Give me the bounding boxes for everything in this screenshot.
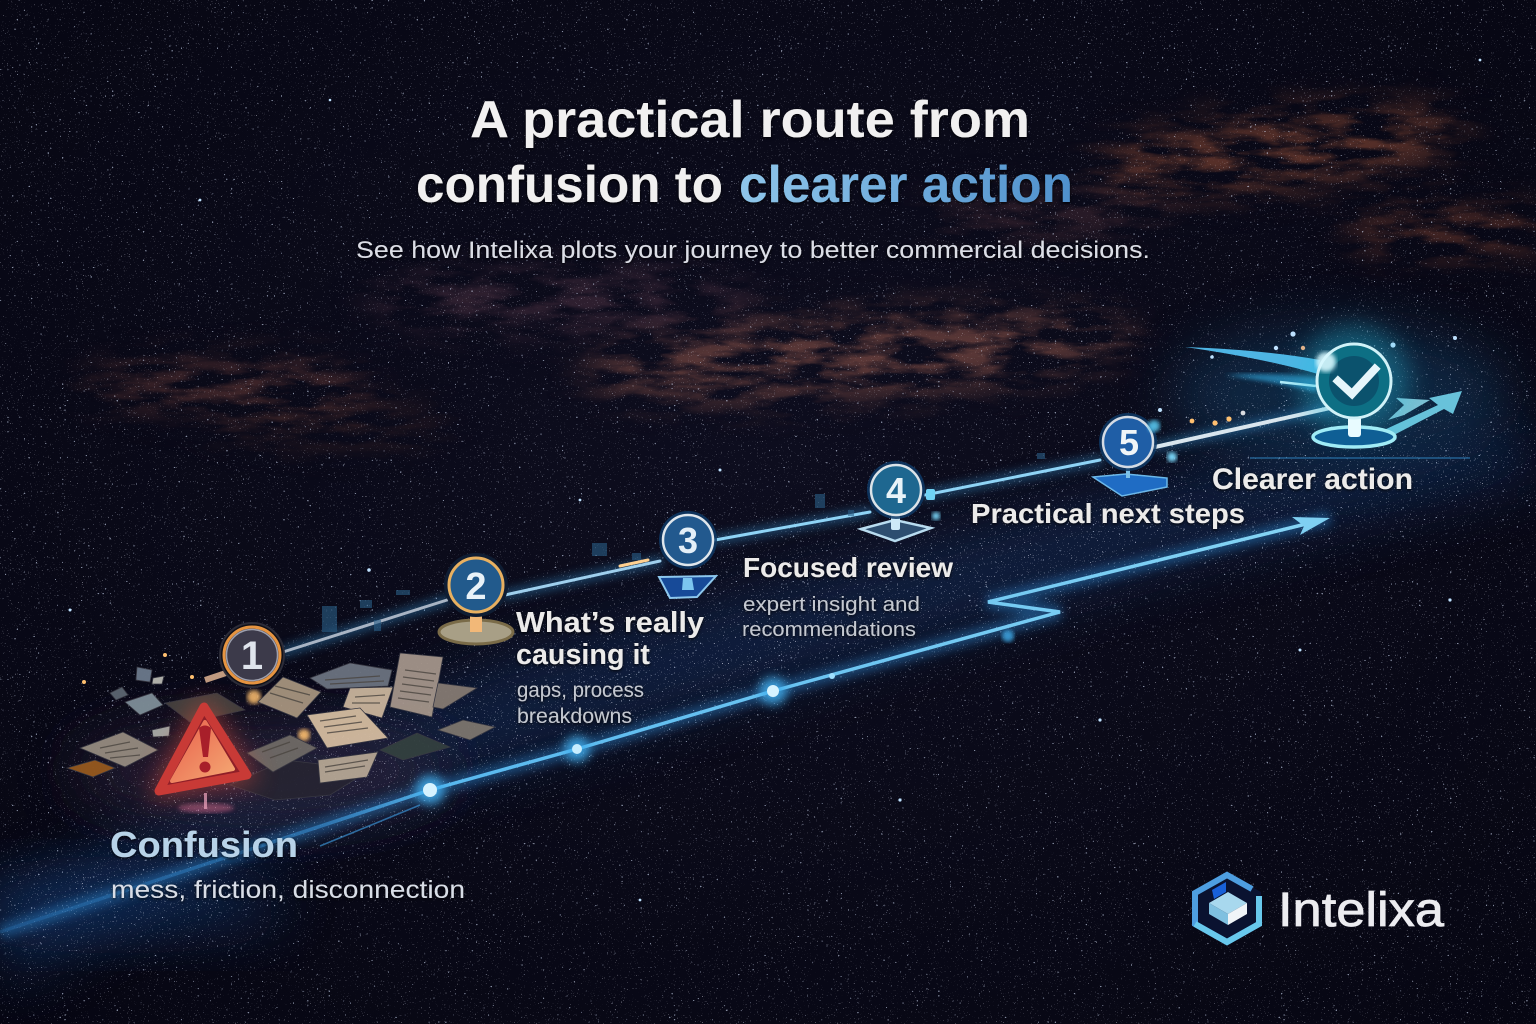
subtitle: See how Intelixa plots your journey to better commercial decisions. xyxy=(356,237,1150,264)
icon: warning triangle xyxy=(156,706,250,813)
label: focused review: expert insight and xyxy=(743,594,920,616)
lower route arrowhead xyxy=(1292,517,1330,535)
destination pin with check mark xyxy=(1298,325,1410,447)
warm lights beside pile xyxy=(82,416,1232,741)
pin 3 xyxy=(659,511,717,598)
label: focused review: Focused review xyxy=(743,552,953,583)
bright stars xyxy=(68,59,1481,901)
pin 5: 5 xyxy=(1119,422,1139,463)
nebula clouds xyxy=(80,94,1536,439)
label: practical next steps: Practical next steps xyxy=(971,498,1245,529)
pin 4: 4 xyxy=(886,470,906,511)
label: what's really causing it: gaps, process xyxy=(517,679,644,702)
label: focused review xyxy=(742,552,953,641)
label: what's really causing it: What’s really xyxy=(516,607,704,639)
paper text lines xyxy=(100,670,436,772)
pin 2 xyxy=(439,553,513,644)
title: clearer action xyxy=(739,156,1073,214)
pin 1: 1 xyxy=(241,634,263,678)
label: focused review: recommendations xyxy=(742,619,916,641)
warning exclamation mark xyxy=(199,726,211,772)
pin 3: 3 xyxy=(678,520,698,561)
pin 2: 2 xyxy=(465,566,487,608)
check mark xyxy=(1338,369,1375,394)
logo: Intelixa: Intelixa xyxy=(1278,884,1444,937)
destination arrow xyxy=(1384,391,1462,436)
title xyxy=(416,91,1073,214)
logo: Intelixa xyxy=(1193,873,1444,944)
label: confusion: mess, friction, disconnection xyxy=(111,876,465,904)
pin 4 xyxy=(861,461,940,541)
title: A practical route from xyxy=(470,91,1030,149)
pin 1 xyxy=(205,623,284,687)
label: confusion: Confusion xyxy=(110,824,298,865)
floating fragments along route xyxy=(322,453,1045,632)
lower route arrow with zigzag xyxy=(0,517,1330,932)
label: what's really causing it: breakdowns xyxy=(517,705,632,728)
upper route path xyxy=(283,408,1330,652)
label: what's really causing it xyxy=(516,607,704,728)
label: clearer action: Clearer action xyxy=(1212,463,1413,496)
swooshes into destination xyxy=(1185,347,1470,458)
diagonal ground glow of the route xyxy=(0,325,1536,990)
pin 5 xyxy=(1093,413,1177,496)
title: confusion to xyxy=(416,156,723,214)
route glowing nodes xyxy=(415,630,1014,805)
icon: hexagon cube xyxy=(1193,873,1261,944)
label: what's really causing it: causing it xyxy=(516,639,650,671)
label: confusion xyxy=(110,824,465,904)
paper pile illustration xyxy=(67,653,495,800)
